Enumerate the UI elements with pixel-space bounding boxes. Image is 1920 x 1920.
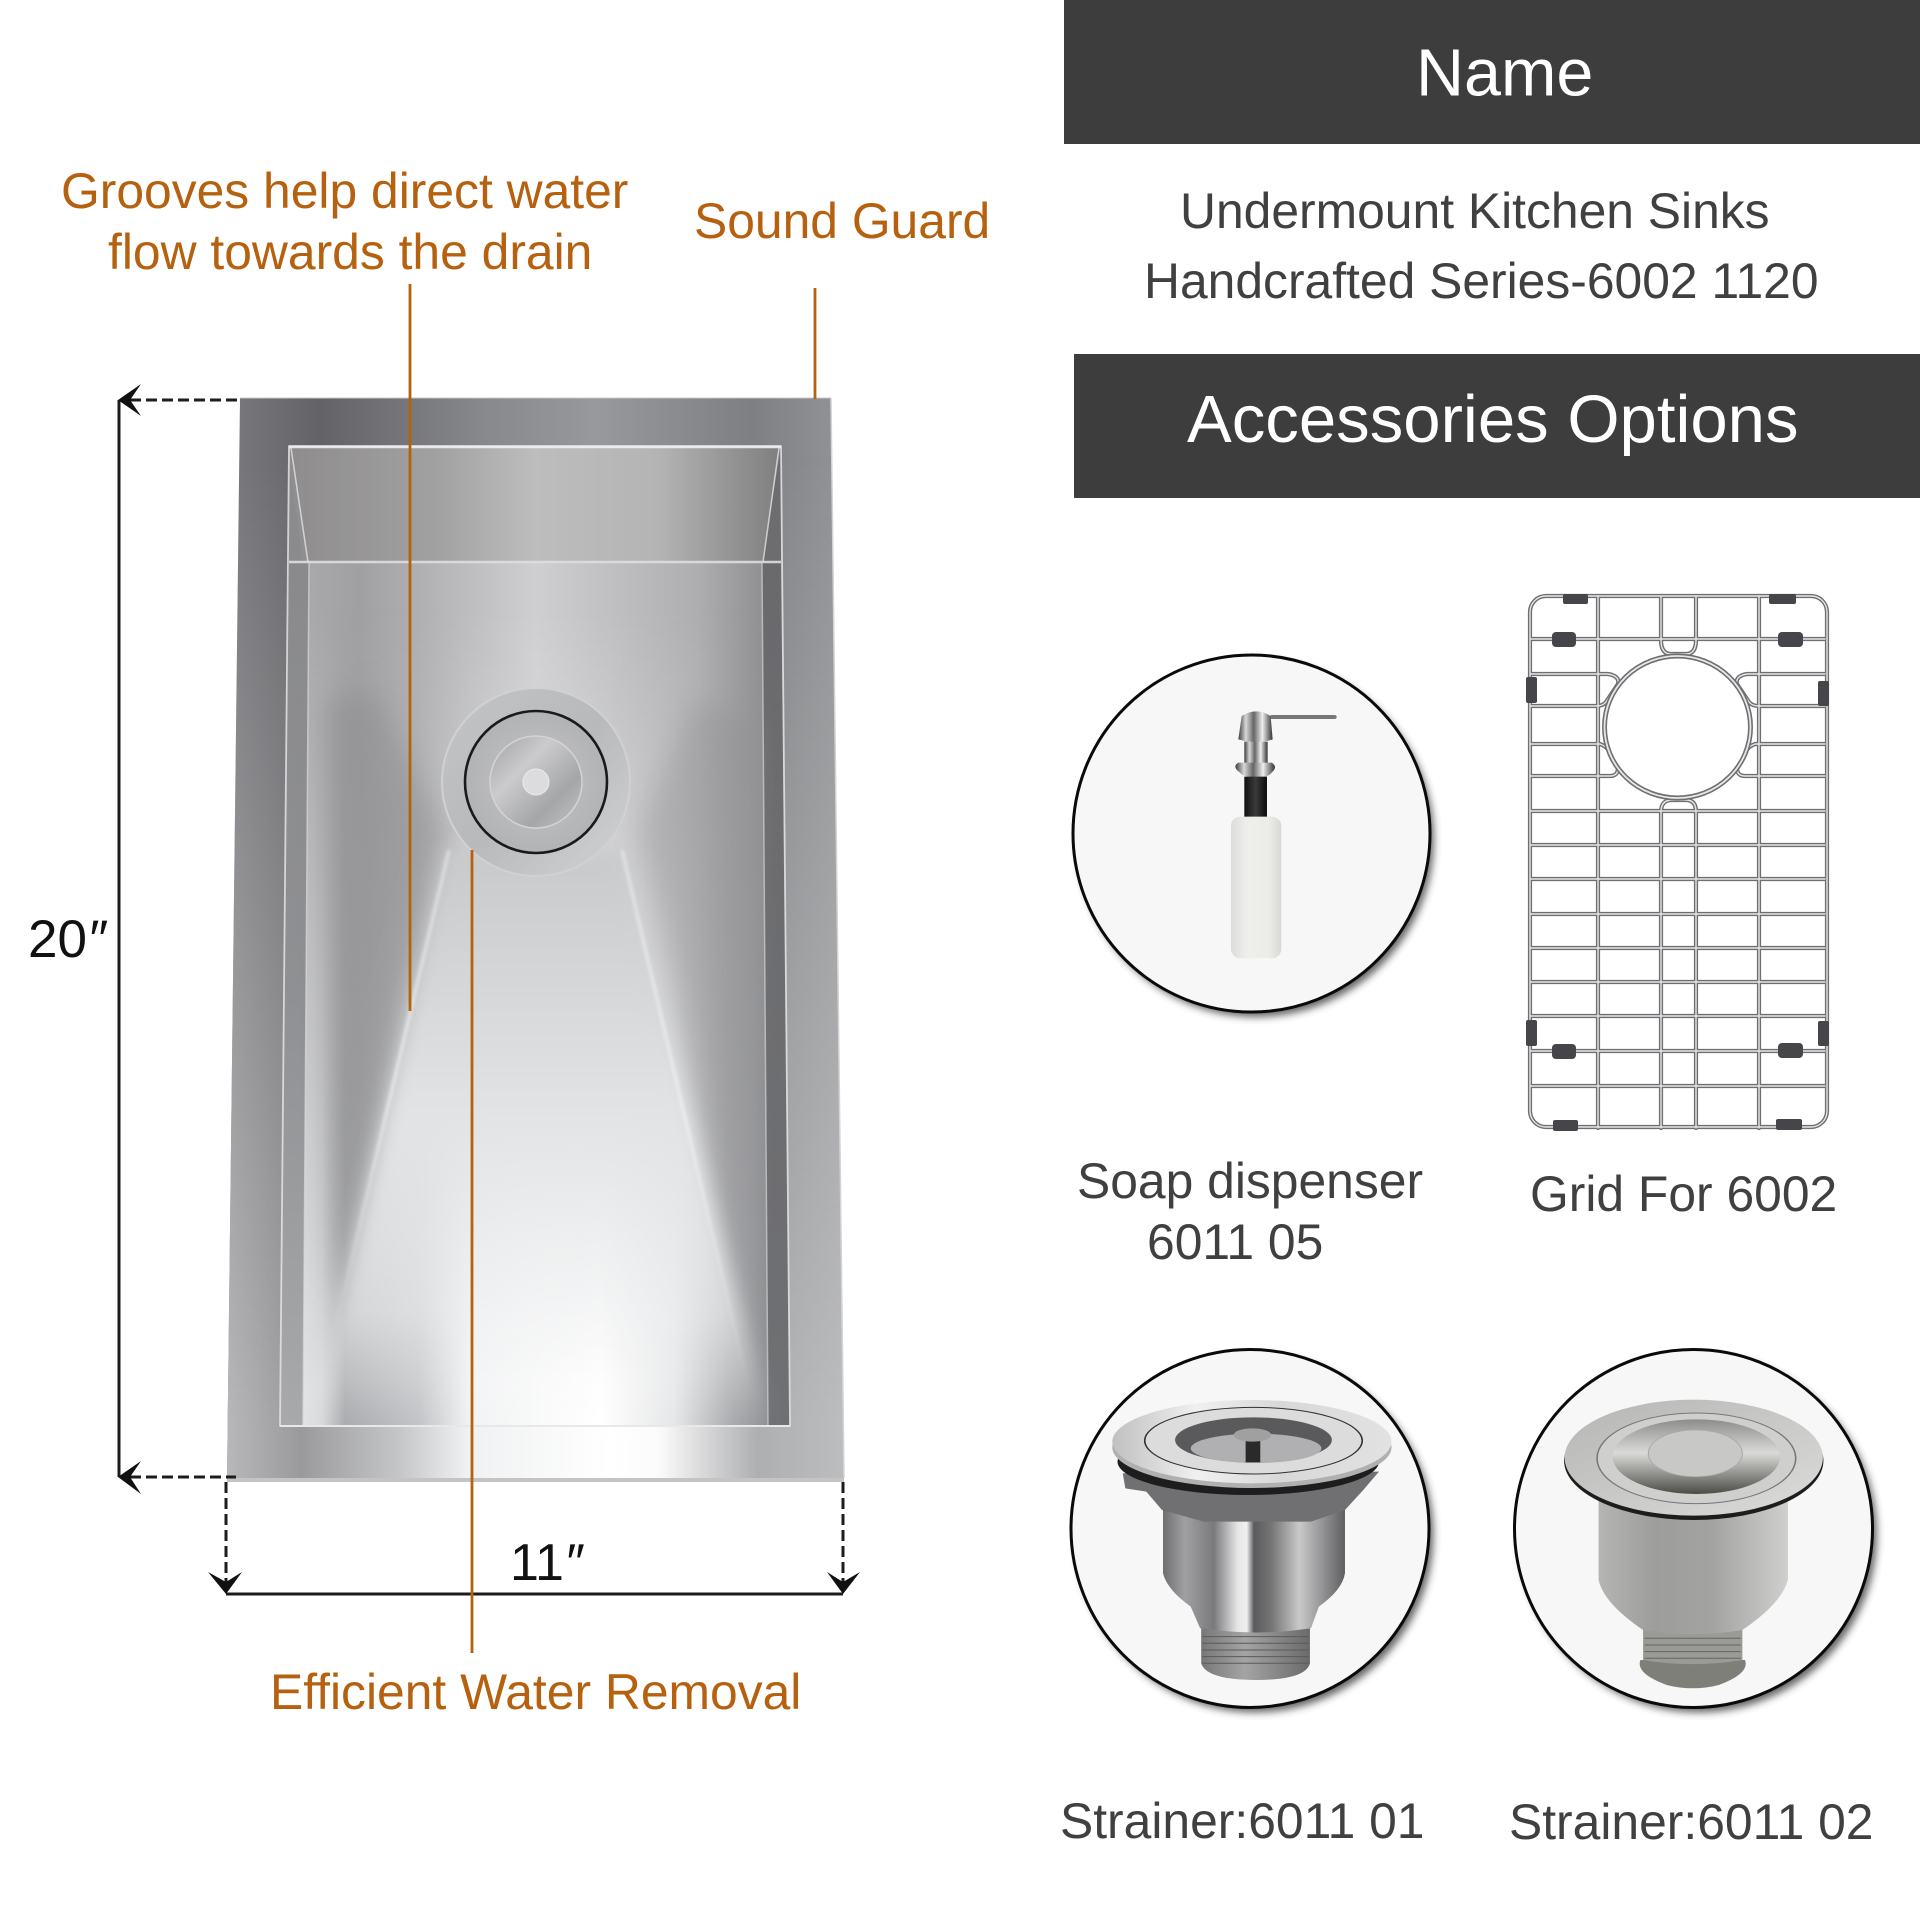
panel: name header <box>1064 0 1920 144</box>
icon: strainer 02 circle <box>1514 1350 1877 1712</box>
label: 20 inches: 20″ <box>28 910 108 969</box>
panel: accessories options header <box>1074 354 1920 498</box>
label: grid for 6002: Grid For 6002 <box>1530 1166 1837 1222</box>
text: product name: Undermount Kitchen Sinks <box>1180 183 1770 239</box>
sink edge highlights <box>280 446 790 1426</box>
sink flange <box>227 398 844 1482</box>
sink basin back wall <box>289 446 781 562</box>
text: product name: Handcrafted Series-6002 1120 <box>1144 253 1819 309</box>
callout: grooves: Grooves help direct water <box>61 163 628 219</box>
dimension: height 20 inches <box>28 384 240 1494</box>
callout: efficient water removal: Efficient Water Removal <box>270 1664 801 1720</box>
dimension: width 11 inches <box>208 1482 860 1594</box>
heading: name: Name <box>1416 36 1593 110</box>
icon: soap dispenser circle <box>1073 655 1434 1017</box>
text: product name <box>1144 183 1819 309</box>
icon: wire grid <box>1526 594 1829 1131</box>
label: 11 inches: 11″ <box>510 1534 584 1592</box>
callout: sound guard: Sound Guard <box>694 193 990 249</box>
label: strainer 6011 02: Strainer:6011 02 <box>1509 1794 1874 1850</box>
icon: strainer 01 circle <box>1071 1350 1434 1712</box>
heading: accessories options: Accessories Options <box>1187 382 1799 457</box>
accessory: soap dispenser <box>1073 655 1434 1270</box>
label: strainer 6011 01: Strainer:6011 01 <box>1060 1793 1425 1849</box>
sink basin floor <box>303 562 770 1426</box>
label: soap dispenser: Soap dispenser <box>1077 1153 1423 1209</box>
accessory: grid for 6002 <box>1526 594 1837 1222</box>
icon: sink drain <box>442 688 630 876</box>
accessory: strainer 6011 01 <box>1060 1350 1434 1849</box>
sink basin side walls <box>280 562 790 1426</box>
panel: sink top view <box>227 398 844 1482</box>
label: soap dispenser code: 6011 05 <box>1147 1214 1323 1270</box>
callout: grooves <box>61 163 628 1011</box>
accessory: strainer 6011 02 <box>1509 1350 1877 1850</box>
callout: grooves: flow towards the drain <box>108 224 592 280</box>
